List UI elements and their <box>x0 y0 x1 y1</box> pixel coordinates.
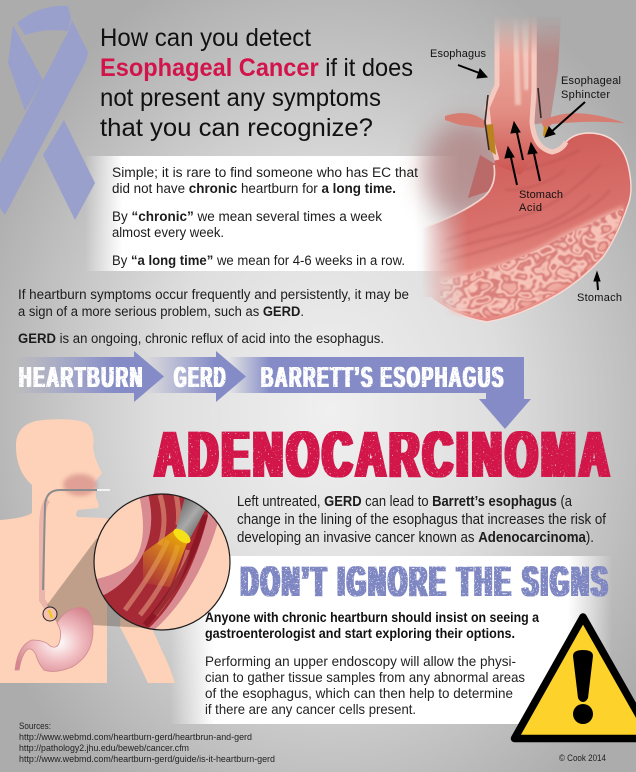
text block: simple explanation: By “chronic” we mean several times a week <box>112 209 382 224</box>
arrows: stomach diagram <box>458 65 600 290</box>
text block: advice: cian to gather tissue samples from any abnormal areas <box>205 669 525 685</box>
diaphragm <box>445 113 625 130</box>
text block: advice <box>205 609 539 717</box>
text block: left untreated: change in the lining of the esophagus that increases the risk of <box>237 512 607 528</box>
white panel: explanation <box>85 156 460 271</box>
stomach body <box>415 125 631 322</box>
arrow: heartburn <box>15 351 164 402</box>
white panel: don't ignore the signs <box>170 556 612 724</box>
text block: simple explanation: Simple; it is rare to find someone who has EC that <box>112 165 418 180</box>
fat deposits <box>485 124 496 155</box>
labels: stomach diagram: Esophageal <box>561 75 621 87</box>
title: How can you detect <box>100 24 311 52</box>
sources: http://www.webmd.com/heartburn-gerd/guide/is-it-heartburn-gerd <box>19 754 275 764</box>
progression labels <box>19 362 505 394</box>
endoscope head <box>176 498 206 538</box>
text block: GERD definition <box>18 287 409 346</box>
icon: awareness ribbon <box>0 6 95 220</box>
copyright: © Cook 2014 <box>559 753 606 763</box>
esophagus interior <box>100 490 208 630</box>
sources: http://www.webmd.com/heartburn-gerd/heartbrun-and-gerd <box>19 732 252 742</box>
text block: advice: Anyone with chronic heartburn should insist on seeing a <box>205 609 539 625</box>
progression labels: HEARTBURN <box>19 362 144 394</box>
text block: advice: of the esophagus, which can then help to determine <box>205 685 513 701</box>
text block: simple explanation <box>112 165 418 268</box>
figure: person with endoscope <box>0 419 175 683</box>
labels: stomach diagram: Esophagus <box>430 48 486 60</box>
outer muscle line <box>485 88 541 150</box>
text block: left untreated: developing an invasive cancer known as Adenocarcinoma). <box>237 530 594 546</box>
title: Esophageal Cancer if it does <box>100 54 413 82</box>
esophagus tube <box>486 15 566 175</box>
rear wedge <box>468 155 497 198</box>
sources: http://pathology2.jhu.edu/beweb/cancer.cfm <box>19 743 189 753</box>
text block: GERD definition: GERD is an ongoing, chronic reflux of acid into the esophagus. <box>18 331 384 346</box>
text block: advice: Performing an upper endoscopy will allow the physi- <box>205 653 516 669</box>
small lens circle <box>43 607 57 621</box>
illustration shadow <box>423 120 507 220</box>
text block: simple explanation: did not have chronic heartburn for a long time. <box>112 181 396 196</box>
pale mucosa band <box>440 205 624 316</box>
title <box>100 24 413 142</box>
light beam <box>143 529 188 587</box>
progression labels: GERD <box>174 362 227 394</box>
upper stomach folds <box>452 150 610 259</box>
text block: advice: gastroenterologist and start exploring their options. <box>205 625 515 641</box>
title: that you can recognize? <box>100 114 373 142</box>
text block: GERD definition: If heartburn symptoms occur frequently and persistently, it may be <box>18 287 409 302</box>
icon: warning triangle <box>514 617 636 738</box>
small stomach <box>15 607 93 671</box>
labels: stomach diagram: Stomach <box>519 189 563 201</box>
labels: stomach diagram <box>430 48 622 304</box>
sources <box>19 721 275 764</box>
dark wrinkles <box>440 208 624 318</box>
text block: left untreated <box>237 494 607 546</box>
magnifier cone <box>47 538 147 628</box>
lens background <box>94 494 230 630</box>
sources: Sources: <box>19 721 51 731</box>
title: not present any symptoms <box>100 84 381 112</box>
endoscope tube <box>43 490 100 590</box>
stomach illustration <box>415 15 631 322</box>
text block: simple explanation: By “a long time” we mean for 4-6 weeks in a row. <box>112 253 405 268</box>
text block: left untreated: Left untreated, GERD can lead to Barrett’s esophagus (a <box>237 494 573 510</box>
arrow: Barrett's esophagus to adenocarcinoma <box>228 357 531 429</box>
endoscope lamp <box>174 528 190 544</box>
rear esophagus shade <box>530 15 561 125</box>
mouth shading <box>63 474 97 496</box>
text block: GERD definition: a sign of a more serious problem, such as GERD. <box>18 304 304 319</box>
text block: advice: if there are any cancer cells present. <box>205 701 416 717</box>
arrow: GERD <box>145 351 246 402</box>
magnified esophagus view <box>92 490 230 632</box>
lens ring <box>94 494 230 630</box>
light wrinkles <box>440 208 624 318</box>
esophagus wall <box>96 496 218 629</box>
text block: simple explanation: almost every week. <box>112 225 224 240</box>
labels: stomach diagram: Acid <box>519 202 542 214</box>
labels: stomach diagram: Stomach <box>577 292 622 304</box>
labels: stomach diagram: Sphincter <box>561 89 610 101</box>
body silhouette <box>0 419 175 683</box>
esophagus outline <box>42 500 50 612</box>
